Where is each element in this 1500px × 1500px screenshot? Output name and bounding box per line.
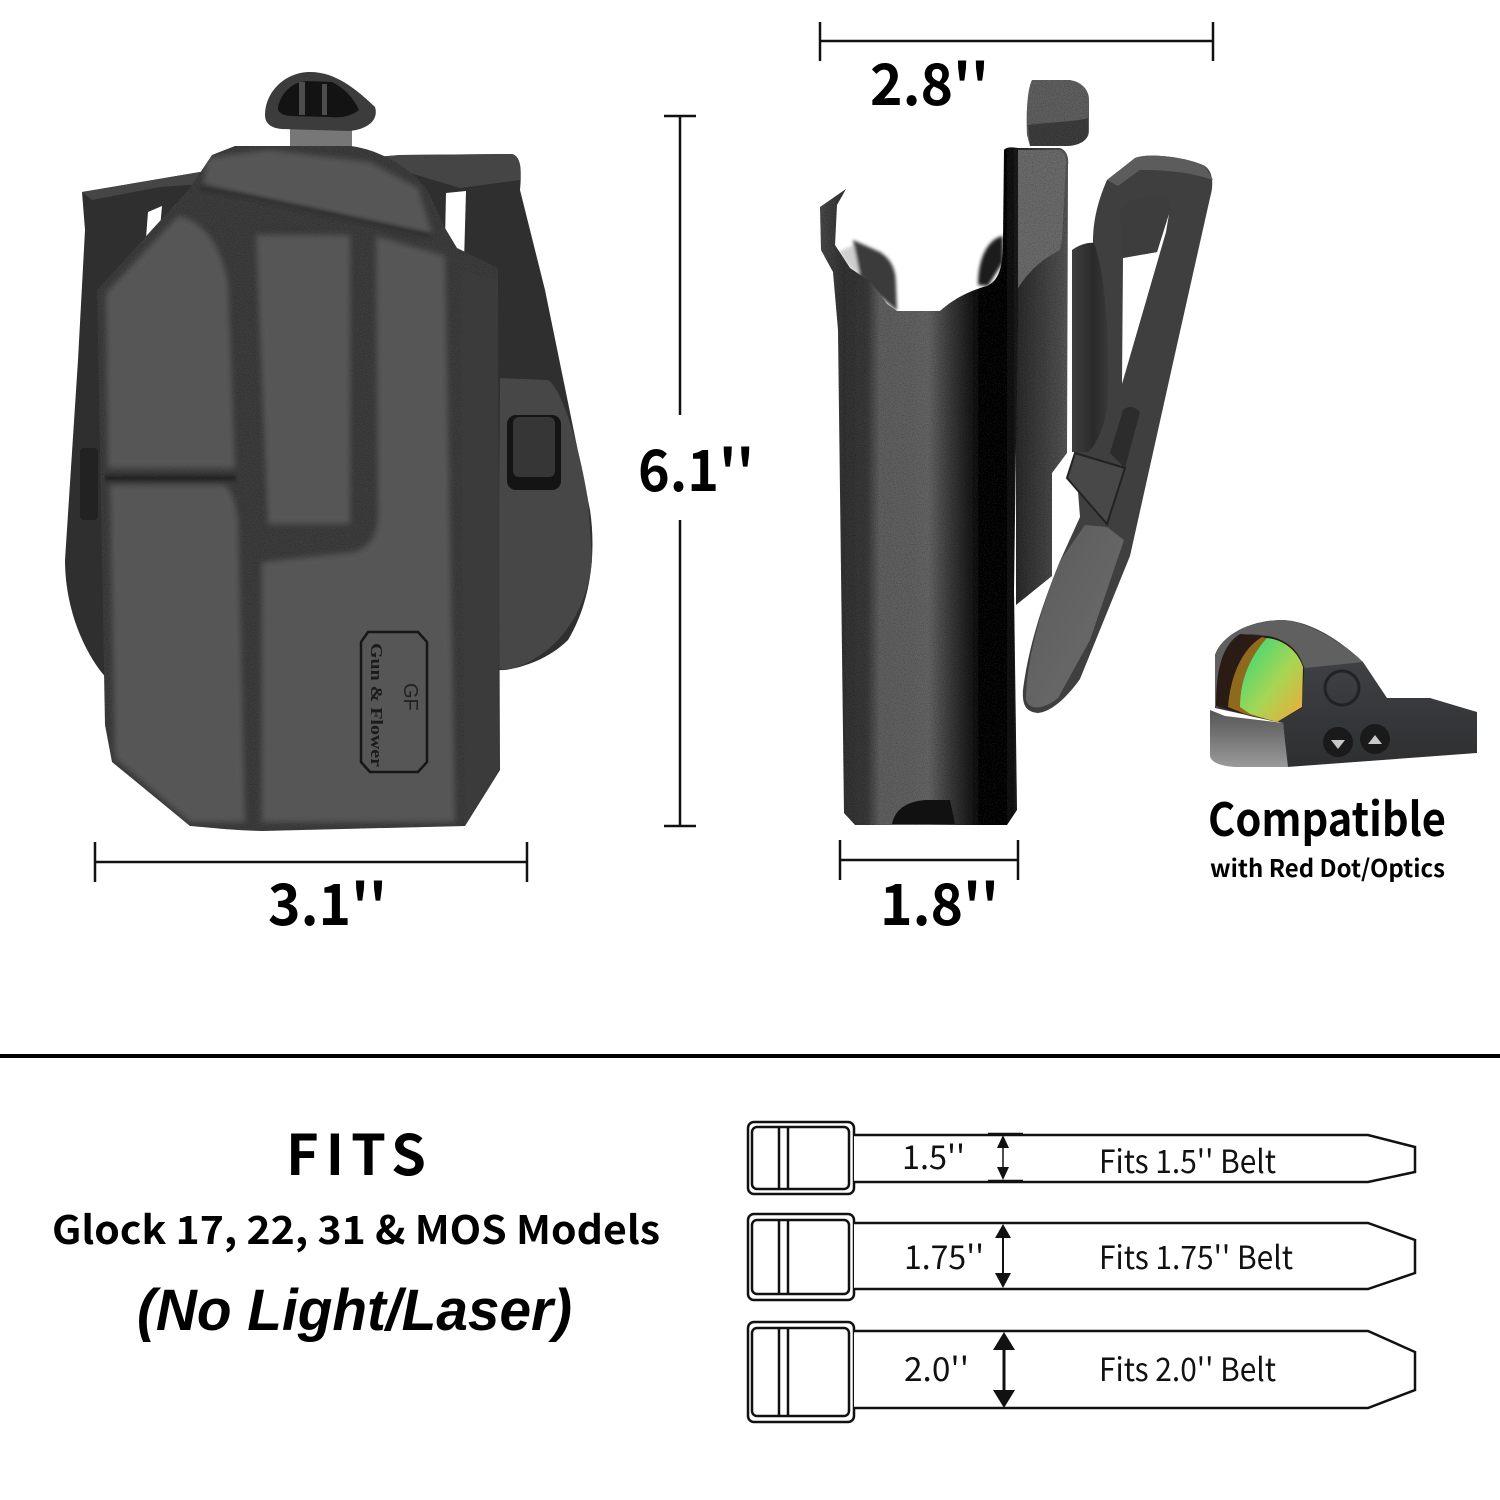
size label: 1.75''	[904, 1231, 984, 1279]
compatible sub heading: with Red Dot/Optics	[1210, 849, 1445, 884]
dimension: 2.8 inch width: 2.8''	[870, 40, 989, 122]
width marker	[993, 1332, 1015, 1408]
clip frame	[1023, 156, 1212, 713]
release knob side	[1027, 80, 1089, 146]
brand badge: Gun & Flower	[367, 643, 386, 767]
optic buttons and logo	[1323, 671, 1390, 757]
strap	[854, 1331, 1415, 1408]
holster moulded panels	[105, 150, 498, 822]
dimension: 1.8 inch depth	[840, 840, 1018, 942]
dimension: 6.1 inch height	[638, 116, 754, 826]
belt clip paddle	[1023, 156, 1213, 713]
muzzle recess	[892, 800, 955, 824]
optic hood	[1215, 620, 1363, 708]
brand badge: GF	[399, 683, 421, 711]
size label: 1.5''	[902, 1131, 965, 1179]
icon: red dot optic	[1210, 620, 1477, 767]
paddle	[65, 154, 592, 680]
dimension: 3.1 inch width: 3.1''	[268, 860, 387, 942]
lens surround	[1216, 634, 1304, 722]
fit label: Fits 2.0'' Belt	[1099, 1345, 1276, 1391]
buckle	[748, 1214, 854, 1300]
dimension: 6.1 inch height: 6.1''	[638, 426, 754, 508]
compatible heading: Compatible	[1208, 784, 1446, 850]
swivel disc	[1072, 243, 1108, 452]
clip rim	[1107, 156, 1213, 186]
fits heading: FITS	[286, 1111, 426, 1192]
belt: 1.5 inch	[748, 1122, 1415, 1194]
buckle	[748, 1322, 854, 1422]
lens ring	[1228, 637, 1277, 722]
belt: 1.75 inch	[748, 1214, 1415, 1300]
dimension: 2.8 inch width	[820, 22, 1213, 122]
clip wedge	[1067, 453, 1125, 524]
side view holster	[820, 80, 1213, 825]
lens glass	[1240, 638, 1303, 722]
brand badge	[361, 632, 427, 772]
strap	[854, 1135, 1415, 1182]
clip slot	[1110, 407, 1140, 468]
holster body	[820, 147, 1018, 825]
front view holster	[65, 72, 592, 831]
lower paddle face	[1026, 525, 1124, 707]
fit label: Fits 1.5'' Belt	[1099, 1137, 1276, 1183]
divider	[0, 1054, 1500, 1058]
fit label: Fits 1.75'' Belt	[1099, 1233, 1293, 1279]
back plate	[1016, 148, 1068, 605]
size label: 2.0''	[904, 1343, 969, 1391]
dimension: 3.1 inch width	[95, 842, 527, 942]
holster shell	[97, 146, 500, 831]
clip tab	[1120, 196, 1170, 258]
icon: release knob	[265, 72, 376, 150]
optic body	[1215, 620, 1477, 767]
optic base	[1210, 710, 1288, 767]
belt: 2.0 inch	[748, 1322, 1415, 1422]
width marker	[988, 1134, 1023, 1181]
buckle	[748, 1122, 854, 1194]
inner rear shadow	[838, 236, 1003, 311]
clip window	[1122, 214, 1169, 384]
strap	[854, 1223, 1415, 1289]
width marker	[995, 1224, 1011, 1288]
exclusion note: (No Light/Laser)	[137, 1278, 572, 1343]
dimension: 1.8 inch depth: 1.8''	[880, 860, 999, 942]
compatible models: Glock 17, 22, 31 & MOS Models	[52, 1200, 660, 1256]
